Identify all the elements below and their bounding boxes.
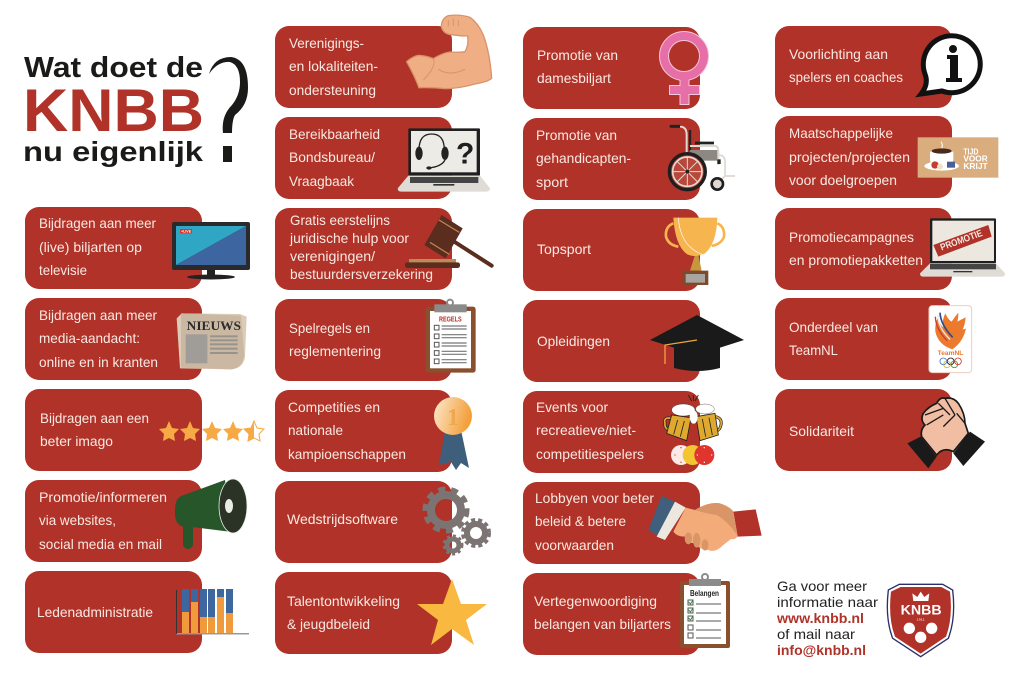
text: wedstrijdsoftware: Wedstrijdsoftware [287, 511, 398, 527]
text: juridische hulp: juridische hulp voor [289, 230, 409, 246]
text: televisie: televisie [39, 262, 87, 278]
icon: gavel [405, 215, 492, 268]
icon: graduation cap [650, 315, 744, 371]
text: websites: via websites, [39, 512, 116, 528]
text: voorlichting: spelers en coaches [789, 69, 903, 85]
text: imago: beter imago [40, 433, 113, 449]
title: KNBB [23, 77, 204, 144]
icon: tijd voor krijt: VOOR [963, 154, 988, 164]
text: spelregels: reglementering [289, 343, 381, 359]
text: teamnl [789, 319, 878, 358]
text: websites: Promotie/informeren [39, 489, 167, 505]
icon: teamnl logo [929, 306, 972, 373]
icon: tijd voor krijt: TIJD [963, 146, 978, 156]
text: solidariteit: Solidariteit [789, 423, 854, 439]
text: ledenadministratie: Ledenadministratie [37, 604, 153, 620]
icon: clipboard belangen [680, 574, 730, 648]
panel: events [523, 391, 721, 473]
text: televisie [39, 215, 156, 278]
icon: clipboard regels: REGELS [439, 315, 462, 324]
text: imago: Bijdragen aan een [40, 410, 149, 426]
text: topsport: Topsport [537, 241, 591, 257]
text block: contact: Ga voor meer [777, 578, 867, 594]
text: websites: social media en mail [39, 536, 162, 552]
text: maatschappelijke projecten: Maatschappelijke [789, 125, 893, 141]
icon: newspaper [177, 313, 247, 369]
icon: tijd voor krijt [918, 137, 998, 178]
text: events: competitiespelers [536, 446, 644, 462]
text: voorlichting: Voorlichting aan [789, 46, 888, 62]
text: events: recreatieve/niet- [536, 422, 636, 438]
icon: tv: +LIVE [181, 230, 192, 234]
text: competities: Competities en [288, 399, 380, 415]
panel: imago [25, 389, 264, 471]
text: gehandicaptensport: Promotie van [536, 127, 617, 143]
text: maatschappelijke projecten [789, 125, 910, 188]
panel: lobbyen [523, 482, 762, 564]
text: competities: kampioenschappen [288, 446, 406, 462]
text: lobbyen: beleid & betere [535, 513, 626, 529]
text: verenigingen: en lokaliteiten- [289, 58, 378, 74]
panel: promotiecampagnes [775, 208, 1005, 290]
panel: opleidingen [523, 300, 744, 382]
text: juridische hulp: Gratis eerstelijns [290, 212, 390, 228]
icon: laptop headset: ? [456, 137, 474, 170]
icon: tv [172, 222, 250, 280]
title: Wat doet de [24, 52, 203, 84]
panel: belangen [523, 573, 730, 655]
icon: teamnl logo: TeamNL [938, 351, 964, 357]
icon: tijd voor krijt: KRIJT [963, 161, 988, 171]
text block: contact: info@knbb.nl [777, 642, 866, 658]
icon: stars [159, 421, 264, 441]
text: maatschappelijke projecten: voor doelgroepen [789, 172, 897, 188]
text: maatschappelijke projecten: projecten/projecten [789, 149, 910, 165]
text: verenigingen: Verenigings- [289, 35, 364, 51]
icon: muscle [407, 15, 492, 89]
text block: contact: www.knbb.nl [776, 610, 864, 626]
icon: venus [664, 36, 704, 105]
icon: beers and billiard balls [665, 395, 721, 465]
panel: websites [25, 479, 247, 562]
text: media: media-aandacht: [39, 330, 140, 346]
text: promotiecampagnes [789, 229, 923, 268]
icon: medal: 1 [447, 405, 459, 431]
panel: dames [523, 27, 704, 109]
panel: televisie [25, 207, 250, 289]
icon: knbb shield: 1911 [917, 618, 925, 622]
panel: bondsbureau [275, 117, 490, 199]
text: media: online en in kranten [39, 354, 158, 370]
text: competities: nationale [288, 422, 343, 438]
text: verenigingen: ondersteuning [289, 82, 376, 98]
panel: ledenadministratie [25, 571, 249, 653]
text: talentontwikkeling [287, 593, 400, 632]
icon: knbb shield: KNBB [901, 601, 942, 617]
text: websites [39, 489, 167, 552]
icon: laptop promotie [920, 218, 1005, 277]
panel: wedstrijdsoftware [275, 481, 489, 563]
text: televisie: (live) biljarten op [39, 239, 142, 255]
text: bondsbureau: Bereikbaarheid [289, 126, 380, 142]
icon: medal [434, 397, 472, 470]
text: juridische hulp: bestuurdersverzekering [290, 266, 433, 282]
text block: contact [776, 578, 878, 658]
text: promotiecampagnes: Promotiecampagnes [789, 229, 914, 245]
icon: question mark [209, 57, 248, 162]
text: dames: Promotie van [537, 47, 618, 63]
panel: competities [275, 390, 472, 472]
text: spelregels: Spelregels en [289, 320, 370, 336]
icon: laptop promotie: PROMOTIE [939, 228, 984, 253]
text: lobbyen [535, 490, 654, 553]
text: gehandicaptensport: sport [536, 174, 568, 190]
icon: wheelchair [669, 126, 735, 190]
icon: clipboard regels [426, 300, 476, 373]
text: spelregels [289, 320, 381, 359]
text: voorlichting [789, 46, 903, 85]
icon: laptop headset [398, 128, 490, 192]
text: lobbyen: voorwaarden [535, 537, 614, 553]
panel: media [25, 298, 247, 380]
panel: talentontwikkeling [275, 572, 487, 654]
text: teamnl: TeamNL [789, 342, 838, 358]
text: events [536, 399, 644, 462]
icon: newspaper: NIEUWS [187, 319, 241, 333]
panel: voorlichting [775, 26, 980, 108]
text: juridische hulp [289, 212, 433, 282]
icon: clipboard belangen: Belangen [690, 589, 719, 598]
text: belangen: Vertegenwoordiging [534, 593, 657, 609]
text: gehandicaptensport: gehandicapten- [536, 150, 631, 166]
text: competities [288, 399, 406, 462]
panel: juridische hulp [275, 208, 492, 290]
text: teamnl: Onderdeel van [789, 319, 878, 335]
icon: info bubble [921, 36, 980, 94]
text: dames: damesbiljart [537, 70, 611, 86]
panel: maatschappelijke projecten [775, 116, 998, 198]
panel: solidariteit [775, 389, 985, 471]
icon: bar chart [176, 589, 249, 634]
icon: knbb shield [887, 584, 954, 657]
text: media [39, 307, 158, 370]
panel: topsport [523, 209, 724, 291]
text: juridische hulp: verenigingen/ [290, 248, 375, 264]
text: bondsbureau: Bondsbureau/ [289, 149, 375, 165]
icon: trophy [666, 218, 724, 285]
text: imago [40, 410, 149, 449]
text: promotiecampagnes: en promotiepakketten [789, 252, 923, 268]
text: lobbyen: Lobbyen voor beter [535, 490, 654, 506]
icon: star [417, 579, 487, 645]
panel: verenigingen [275, 15, 492, 108]
text: belangen: belangen van biljarters [534, 616, 671, 632]
text: talentontwikkeling: Talentontwikkeling [287, 593, 400, 609]
text: talentontwikkeling: & jeugdbeleid [287, 616, 370, 632]
text: media: Bijdragen aan meer [39, 307, 157, 323]
text: belangen [534, 593, 671, 632]
title [23, 52, 248, 167]
panel: spelregels [275, 299, 476, 381]
text: verenigingen [289, 35, 378, 98]
text block: contact: informatie naar [777, 594, 878, 610]
text: bondsbureau [289, 126, 380, 189]
icon: gears [425, 489, 489, 554]
panel: gehandicaptensport [523, 118, 735, 200]
text: events: Events voor [536, 399, 608, 415]
icon: megaphone [175, 479, 247, 549]
icon: handshake [648, 496, 762, 551]
title: nu eigenlijk [23, 136, 203, 167]
text block: contact: of mail naar [777, 626, 855, 642]
text: opleidingen: Opleidingen [537, 333, 610, 349]
panel: teamnl [775, 298, 972, 380]
text: gehandicaptensport [536, 127, 631, 190]
text: dames [537, 47, 618, 86]
text: televisie: Bijdragen aan meer [39, 215, 156, 231]
text: bondsbureau: Vraagbaak [289, 173, 355, 189]
icon: clasped hands [907, 398, 985, 468]
